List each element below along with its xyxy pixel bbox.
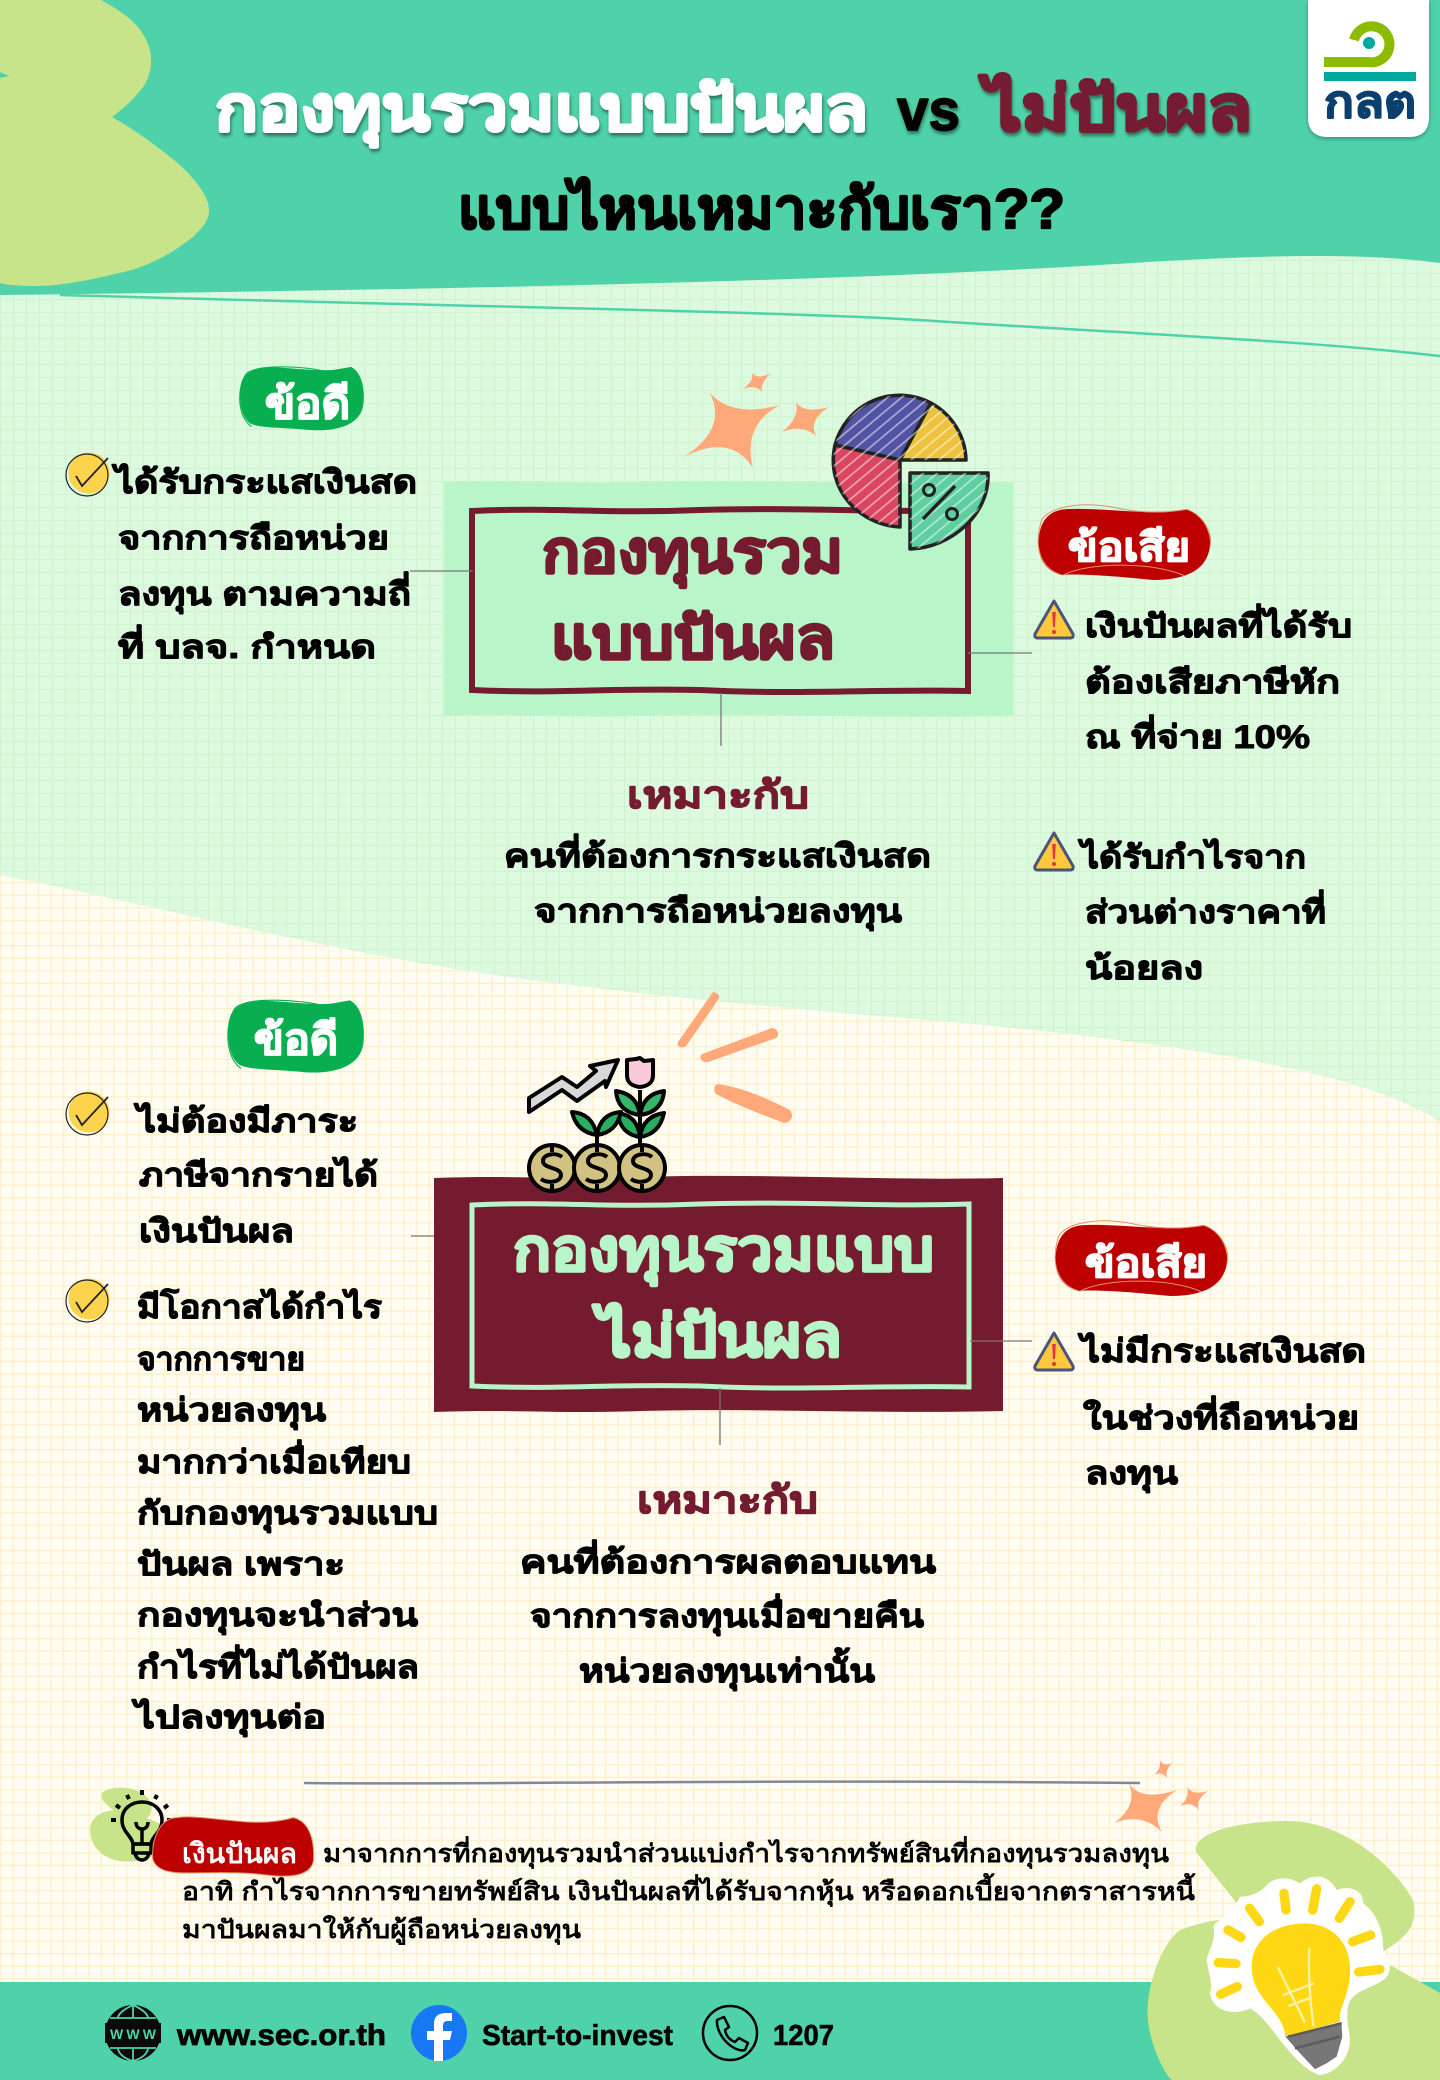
sketch divider line [304, 1782, 1140, 1783]
badge: pros 2: ข้อดี [254, 1016, 338, 1063]
text: cons 2: ในช่วงที่ถือหน่วย [1083, 1395, 1359, 1436]
text: dividend definition: มาปันผลมาให้กับผู้ถือหน่วยลงทุน [182, 1914, 581, 1946]
text: pros 1 [111, 463, 417, 665]
panel 1 connectors [410, 571, 1032, 746]
title: vs [897, 78, 960, 143]
text: pros 2 item 2: หน่วยลงทุน [137, 1392, 326, 1431]
text: cons 1 item 1: ต้องเสียภาษีหัก [1085, 664, 1340, 700]
icon: light bulb [1207, 1877, 1390, 2075]
text: cons 1 item 2: น้อยลง [1085, 950, 1203, 986]
badge: cons 2 [1055, 1221, 1228, 1296]
text: cons 1 item 2: ส่วนต่างราคาที่ [1085, 889, 1326, 930]
text: suitable for 2: หน่วยลงทุนเท่านั้น [579, 1647, 875, 1692]
text: dividend definition [182, 1836, 1196, 1946]
header divider line [60, 295, 1440, 356]
icon: warning 1 [1035, 601, 1073, 638]
text: pros 2 item 2: ปันผล เพราะ [137, 1546, 345, 1582]
title: กองทุนรวมแบบปันผล [215, 75, 868, 147]
text: pros 1: ได้รับกระแสเงินสด [111, 463, 417, 500]
icon: growing coins [529, 1058, 665, 1191]
panel: dividend fund [444, 481, 1013, 717]
text: pros 2 item 2: มีโอกาสได้กำไร [137, 1288, 382, 1325]
decorative green blob top left [0, 0, 209, 286]
icon: phone [703, 2006, 757, 2060]
logo: SEC [1308, 0, 1429, 137]
text: hotline: 1207 [773, 2020, 834, 2052]
text: pros 2 item 2: กับกองทุนรวมแบบ [137, 1495, 438, 1534]
text: suitable for 1 [504, 833, 931, 932]
badge: dividend [153, 1817, 314, 1876]
text: pros 1: จากการถือหน่วย [118, 520, 389, 556]
text: pros 2 item 2: จากการขาย [137, 1341, 305, 1377]
badge: cons 1 [1038, 505, 1211, 580]
text: cons 2: ลงทุน [1085, 1455, 1178, 1494]
text: pros 2 item 2: ไปลงทุนต่อ [131, 1698, 326, 1738]
sparkles [682, 373, 829, 468]
subtitle: แบบไหนเหมาะกับเรา?? [458, 176, 1065, 240]
badge: pros 1 [240, 367, 364, 430]
logo: SEC: กลต [1324, 78, 1416, 127]
icon: check 3 [66, 1278, 110, 1322]
icon: facebook [411, 2005, 467, 2061]
title [215, 73, 1252, 147]
icon: small bulb with blob [90, 1788, 172, 1862]
panel: no-dividend fund: ไม่ปันผล [591, 1303, 842, 1369]
header band [0, 0, 1440, 295]
heading: suitable for 1: เหมาะกับ [627, 775, 809, 817]
text: pros 2 item 1: เงินปันผล [139, 1213, 294, 1249]
title: ไม่ปันผล [978, 73, 1252, 144]
text: suitable for 2: จากการลงทุนเมื่อขายคืน [530, 1593, 924, 1637]
text: pros 1: ลงทุน ตามความถี่ [118, 571, 411, 615]
panel: no-dividend fund: กองทุนรวมแบบ [513, 1218, 934, 1287]
decorative green blobs bottom right [1148, 1821, 1440, 2080]
text: cons 1 item 2: ได้รับกำไรจาก [1078, 838, 1306, 875]
text: dividend definition: มาจากการที่กองทุนรวมนำส่วนแบ่งกำไรจากทรัพย์สินที่กองทุนรวมลงทุน [323, 1836, 1169, 1870]
footer band [0, 1982, 1440, 2080]
sparkles bottom [1114, 1760, 1208, 1832]
panel 2 connectors [411, 1236, 1032, 1445]
panel: dividend fund: แบบปันผล [551, 606, 835, 671]
text: cons 1 item 1: ณ ที่จ่าย 10% [1085, 714, 1310, 755]
heading: suitable for 2: เหมาะกับ [637, 1480, 818, 1522]
badge: dividend: เงินปันผล [182, 1838, 297, 1869]
badge: pros 1: ข้อดี [265, 380, 350, 427]
icon: check 2 [66, 1092, 110, 1135]
text: pros 2 item 2: มากกว่าเมื่อเทียบ [137, 1439, 411, 1480]
text: pros 2 item 1: ภาษีจากรายได้ [139, 1156, 378, 1193]
text: website: www.sec.or.th [176, 2019, 386, 2052]
text: cons 1 item 1: เงินปันผลที่ได้รับ [1085, 603, 1352, 644]
text: cons 2 [1077, 1332, 1366, 1494]
text: pros 1: ที่ บลจ. กำหนด [118, 624, 376, 665]
text: suitable for 2 [520, 1539, 936, 1692]
text: pros 2 item 2 [131, 1288, 438, 1738]
icon: warning 3 [1035, 1333, 1073, 1370]
background: green grid section [0, 240, 1440, 1122]
text: cons 1 item 2 [1078, 838, 1326, 986]
badge: pros 2 [228, 1000, 364, 1073]
text: suitable for 2: คนที่ต้องการผลตอบแทน [520, 1539, 936, 1580]
badge: cons 2: ข้อเสีย [1085, 1242, 1207, 1286]
icon: globe: WWW [110, 2026, 157, 2042]
text: suitable for 1: คนที่ต้องการกระแสเงินสด [504, 833, 931, 874]
text: pros 2 item 2: กำไรที่ไม่ได้ปันผล [137, 1644, 419, 1685]
panel: dividend fund: กองทุนรวม [542, 520, 843, 589]
text: cons 1 item 1 [1085, 603, 1352, 755]
accent strokes [678, 992, 792, 1123]
text: pros 2 item 2: กองทุนจะนำส่วน [137, 1597, 418, 1636]
icon: globe [105, 2005, 161, 2061]
text: dividend definition: อาทิ กำไรจากการขายทรัพย์สิน เงินปันผลที่ได้รับจากหุ้น หรือดอกเบี้ยจากตราสารหนี้ [182, 1872, 1196, 1908]
panel: no-dividend fund [434, 1176, 1003, 1412]
badge: cons 1: ข้อเสีย [1068, 526, 1190, 570]
icon: warning 2 [1035, 833, 1073, 870]
icon: pie chart [833, 395, 988, 549]
text: suitable for 1: จากการถือหน่วยลงทุน [534, 893, 902, 932]
text: facebook page: Start-to-invest [482, 2020, 673, 2052]
text: pros 2 item 1 [133, 1102, 378, 1249]
text: cons 2: ไม่มีกระแสเงินสด [1077, 1332, 1366, 1369]
icon: check 1 [66, 452, 110, 496]
text: pros 2 item 1: ไม่ต้องมีภาระ [133, 1102, 358, 1139]
